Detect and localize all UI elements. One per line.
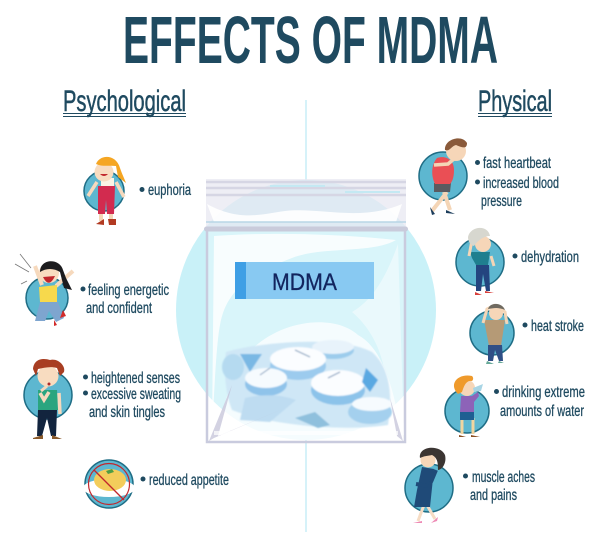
heading: physical: Physical bbox=[478, 85, 552, 118]
text: reduced appetite bbox=[140, 472, 229, 489]
panel: fast heartbeat bbox=[419, 138, 559, 215]
icon: boy drinking water bbox=[445, 375, 489, 437]
panel: feeling energetic bbox=[15, 254, 169, 326]
text: fast heartbeat, increased blood pressure: pressure bbox=[481, 193, 522, 210]
text: heightened senses, excessive sweating bbox=[83, 370, 181, 421]
icon: happy girl bbox=[84, 157, 126, 225]
text: fast heartbeat, increased blood pressure bbox=[475, 155, 559, 210]
text: feeling energetic and confident: and confident bbox=[86, 300, 152, 317]
icon: boy clutching chest bbox=[419, 138, 467, 215]
text: drinking extreme amounts of water bbox=[494, 384, 585, 420]
text: feeling energetic and confident: feeling energetic bbox=[88, 282, 169, 299]
icon: man holding head bbox=[470, 304, 514, 364]
panel: euphoria bbox=[84, 157, 191, 225]
panel: dehydration bbox=[456, 228, 579, 295]
background circle bbox=[176, 180, 436, 440]
icon: sweating boy bbox=[24, 359, 72, 439]
text: euphoria: euphoria bbox=[148, 182, 191, 199]
text: feeling energetic and confident bbox=[80, 282, 169, 317]
text: fast heartbeat, increased blood pressure: increased blood bbox=[483, 175, 559, 192]
label: MDMA bbox=[235, 262, 374, 299]
text: fast heartbeat, increased blood pressure: fast heartbeat bbox=[483, 155, 551, 172]
icon: woman in pain bbox=[405, 448, 453, 523]
pills bbox=[222, 340, 392, 428]
text: heightened senses, excessive sweating: and skin tingles bbox=[89, 404, 165, 421]
label: MDMA: MDMA bbox=[272, 269, 337, 296]
text: muscle aches and pains: and pains bbox=[470, 487, 517, 504]
text: muscle aches and pains bbox=[463, 469, 535, 504]
heading: physical bbox=[478, 85, 552, 118]
icon: no food bbox=[83, 460, 135, 508]
heading: psychological: Psychological bbox=[63, 85, 186, 118]
panel: muscle aches and pains bbox=[405, 448, 535, 523]
text: heightened senses, excessive sweating: excessive sweating bbox=[91, 386, 181, 403]
panel: heightened senses bbox=[24, 359, 181, 439]
panel: plastic bag with pills bbox=[204, 179, 408, 443]
panel: heat stroke bbox=[470, 304, 584, 364]
panel: drinking extreme amounts of water bbox=[445, 375, 585, 437]
heading: psychological bbox=[63, 85, 186, 118]
text: muscle aches and pains: muscle aches bbox=[472, 469, 535, 486]
icon: old man bbox=[456, 228, 504, 295]
icon: jumping girl bbox=[15, 254, 73, 326]
text: reduced appetite: reduced appetite bbox=[149, 472, 229, 489]
text: heightened senses, excessive sweating: heightened senses bbox=[91, 370, 180, 387]
panel: reduced appetite bbox=[83, 460, 229, 508]
